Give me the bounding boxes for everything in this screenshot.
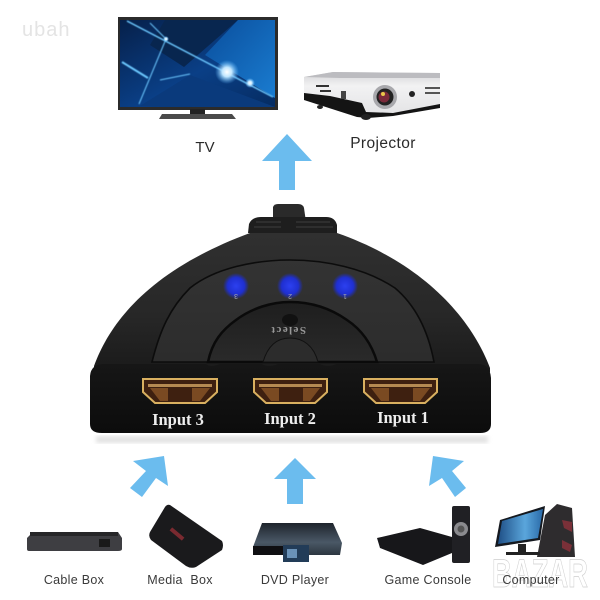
icon: computer — [495, 504, 575, 557]
port: input 1 — [364, 379, 437, 403]
watermark: ubah: ubah — [22, 19, 70, 41]
inner arc panel — [152, 260, 434, 362]
LED 3 — [223, 273, 249, 299]
label: Media Box: Media Box — [147, 573, 213, 587]
LED 2 — [277, 273, 303, 299]
select arc — [208, 302, 377, 362]
arrow: up to displays — [262, 134, 312, 190]
select button — [282, 314, 298, 326]
icon: DVD player — [253, 523, 342, 562]
LED 3: 3 — [234, 292, 238, 299]
label: Input 3: Input 3 — [152, 410, 204, 429]
label: Computer: Computer — [502, 573, 560, 587]
LED 2: 2 — [288, 292, 292, 299]
HDMI switch — [90, 204, 491, 433]
port: input 2 — [254, 379, 327, 403]
label: Cable Box: Cable Box — [44, 573, 105, 587]
arrow: right input — [429, 456, 466, 497]
icon: media box — [149, 505, 223, 568]
label: DVD Player: DVD Player — [261, 573, 329, 587]
switch dome — [94, 233, 490, 372]
label: Input 1: Input 1 — [377, 408, 429, 427]
LED 1 — [332, 273, 358, 299]
arrow: middle input — [274, 458, 316, 504]
label: TV: TV — [195, 139, 215, 156]
label: Input 2: Input 2 — [264, 409, 316, 428]
cable — [273, 204, 306, 222]
icon: projector — [304, 72, 440, 120]
front face — [90, 364, 491, 433]
cable collar — [248, 217, 337, 233]
device shadow — [96, 436, 488, 443]
arrow: left input — [130, 456, 168, 497]
label: Projector: Projector — [350, 135, 416, 152]
label: Game Console: Game Console — [385, 573, 471, 587]
select notch — [263, 338, 318, 362]
icon: game console and remote — [377, 506, 470, 565]
LED 1: 1 — [343, 292, 347, 299]
icon: cable box — [27, 532, 122, 551]
port: input 3 — [143, 379, 217, 403]
icon: TV — [118, 17, 278, 119]
select label: Select — [270, 324, 306, 336]
